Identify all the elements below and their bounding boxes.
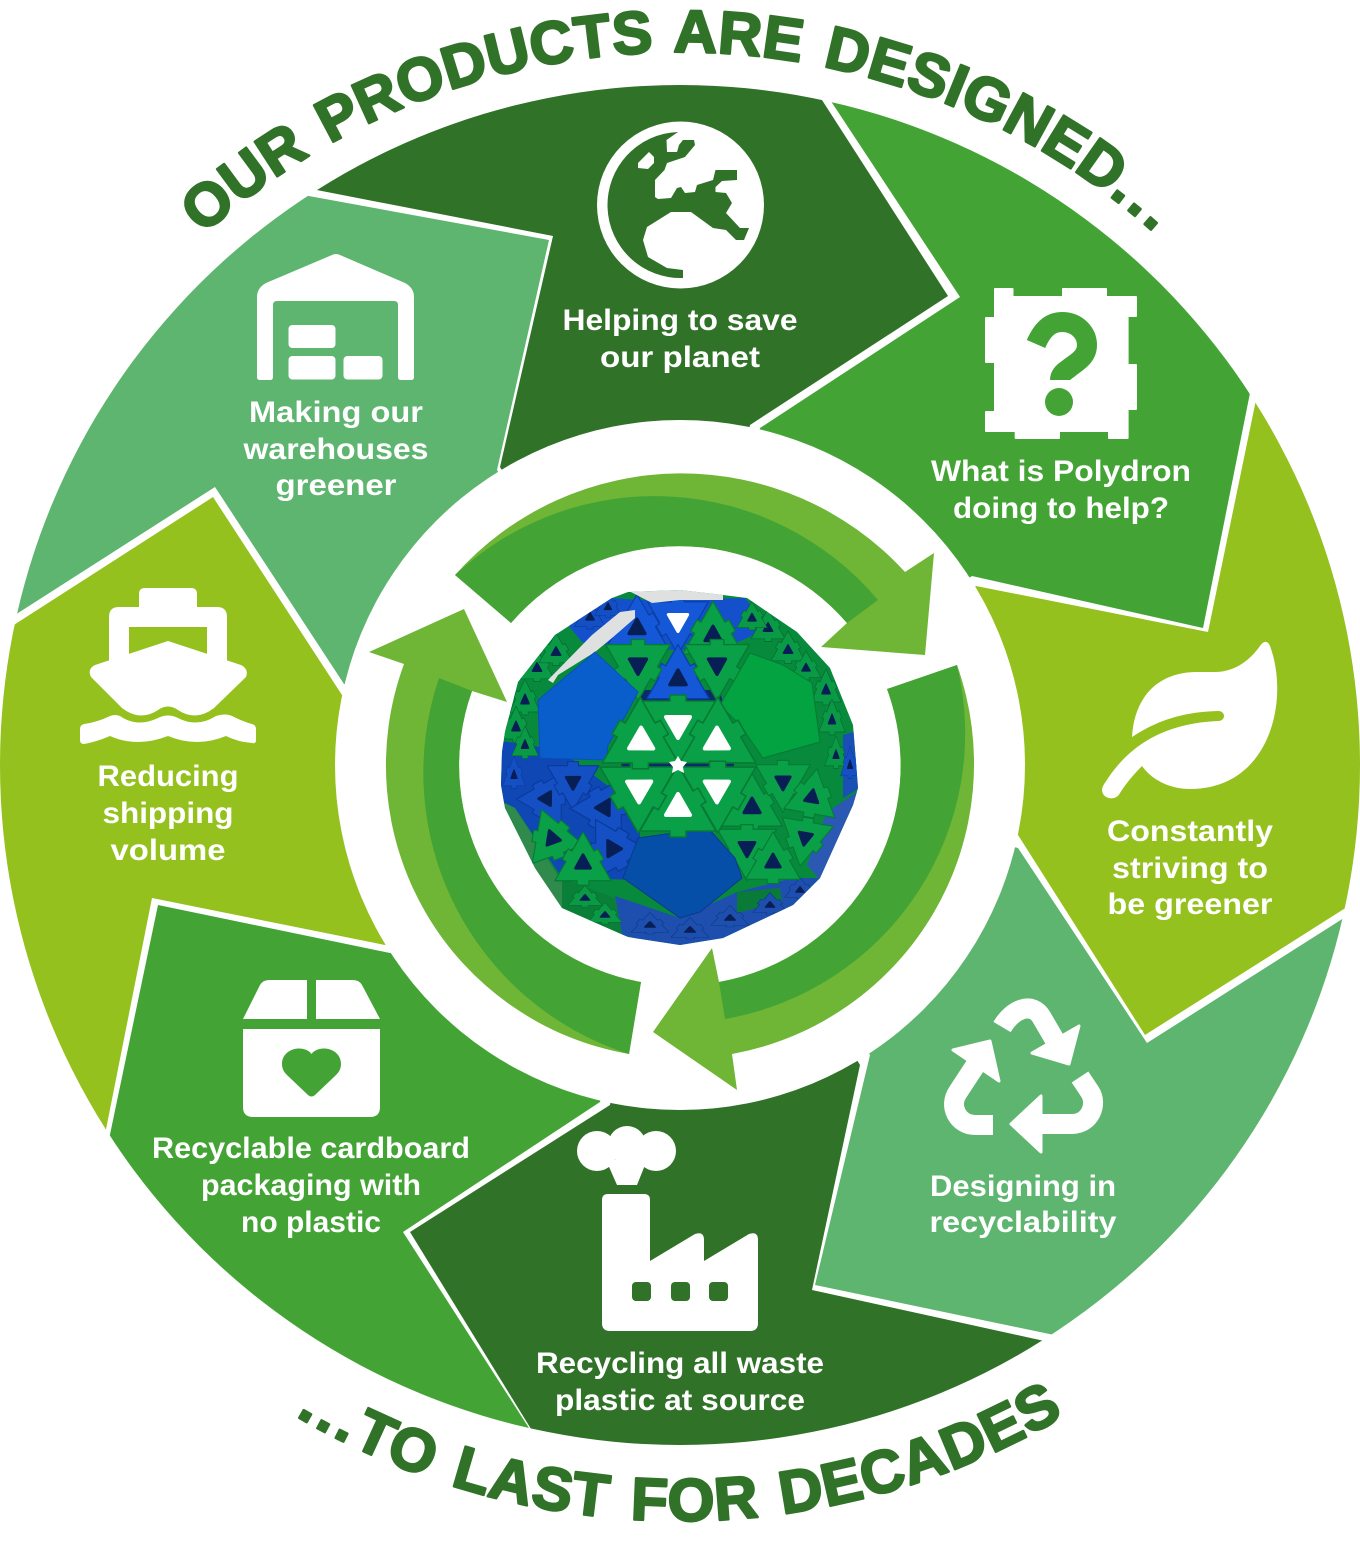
label: greener warehouses: greener <box>276 469 397 502</box>
icon: globe <box>597 122 764 288</box>
label: constantly striving: Constantly <box>1107 815 1273 848</box>
icon: leaf <box>1102 642 1277 798</box>
label: reducing shipping volume <box>98 760 238 867</box>
label: constantly striving: striving to <box>1112 852 1268 885</box>
segment: recycling all waste <box>410 1060 1042 1445</box>
label: reducing shipping volume: Reducing <box>98 760 238 793</box>
label: reducing shipping volume: volume <box>110 834 226 867</box>
segment: helping to save our planet <box>317 85 948 470</box>
label: greener warehouses: warehouses <box>242 433 428 466</box>
ball: rim small plates <box>501 592 860 939</box>
label: greener warehouses: Making our <box>249 396 423 429</box>
label: designing in recyclability: recyclability <box>930 1206 1117 1239</box>
icon: box with heart <box>243 980 380 1117</box>
label: recyclable packaging <box>152 1132 470 1239</box>
arrow: right cycle arrow <box>653 665 974 1090</box>
icon: warehouse <box>257 254 414 380</box>
label: designing in recyclability <box>930 1170 1117 1239</box>
label: recycling all waste: Recycling all waste <box>536 1347 824 1380</box>
label: what is Polydron <box>931 455 1191 525</box>
icon: ship <box>80 588 256 744</box>
label: greener warehouses <box>242 396 428 502</box>
label: what is Polydron: What is Polydron <box>931 455 1191 488</box>
segment: recyclable packaging <box>110 905 600 1428</box>
curved heading: top: OUR PRODUCTS ARE DESIGNED... <box>184 10 1158 231</box>
ball: upper triangles <box>606 594 749 704</box>
curved heading: bottom: ...TO LAST FOR DECADES <box>298 1384 1060 1522</box>
segment: constantly striving <box>975 402 1360 1035</box>
label: recycling all waste <box>536 1347 824 1417</box>
label: recyclable packaging: Recyclable cardboard <box>152 1132 470 1165</box>
arrow: top cycle arrow <box>455 473 934 655</box>
icon: factory <box>577 1126 758 1331</box>
icon: puzzle question <box>986 289 1136 438</box>
label: what is Polydron: doing to help? <box>953 492 1169 525</box>
ball: central six triangles <box>595 694 761 837</box>
segment: what is Polydron doing <box>760 102 1250 628</box>
label: designing in recyclability: Designing in <box>930 1170 1116 1203</box>
white inner disc <box>335 420 1025 1110</box>
label: reducing shipping volume: shipping <box>102 797 234 830</box>
ball: pentagon blue <box>538 652 638 760</box>
label: constantly striving <box>1107 815 1273 921</box>
segment: designing in recyclability <box>815 847 1342 1334</box>
label: helping to save <box>562 304 798 374</box>
icon: recycle arrows <box>953 1008 1093 1152</box>
ball: pentagon bottom <box>623 828 742 918</box>
central ball: polydron earth <box>495 585 865 950</box>
label: helping to save: our planet <box>600 341 760 374</box>
arrow: left cycle arrow <box>369 609 641 1054</box>
segment: greener warehouses <box>17 196 549 684</box>
segment: reducing shipping volume <box>0 497 386 1130</box>
label: recyclable packaging: packaging with <box>201 1169 421 1202</box>
label: constantly striving: be greener <box>1108 888 1273 921</box>
label: helping to save: Helping to save <box>562 304 798 337</box>
label: recyclable packaging: no plastic <box>241 1206 381 1239</box>
ball: pentagon green <box>720 653 820 758</box>
label: recycling all waste: plastic at source <box>555 1384 805 1417</box>
ball: lower side triangles <box>514 760 842 885</box>
ball: white snow patches <box>548 588 723 683</box>
